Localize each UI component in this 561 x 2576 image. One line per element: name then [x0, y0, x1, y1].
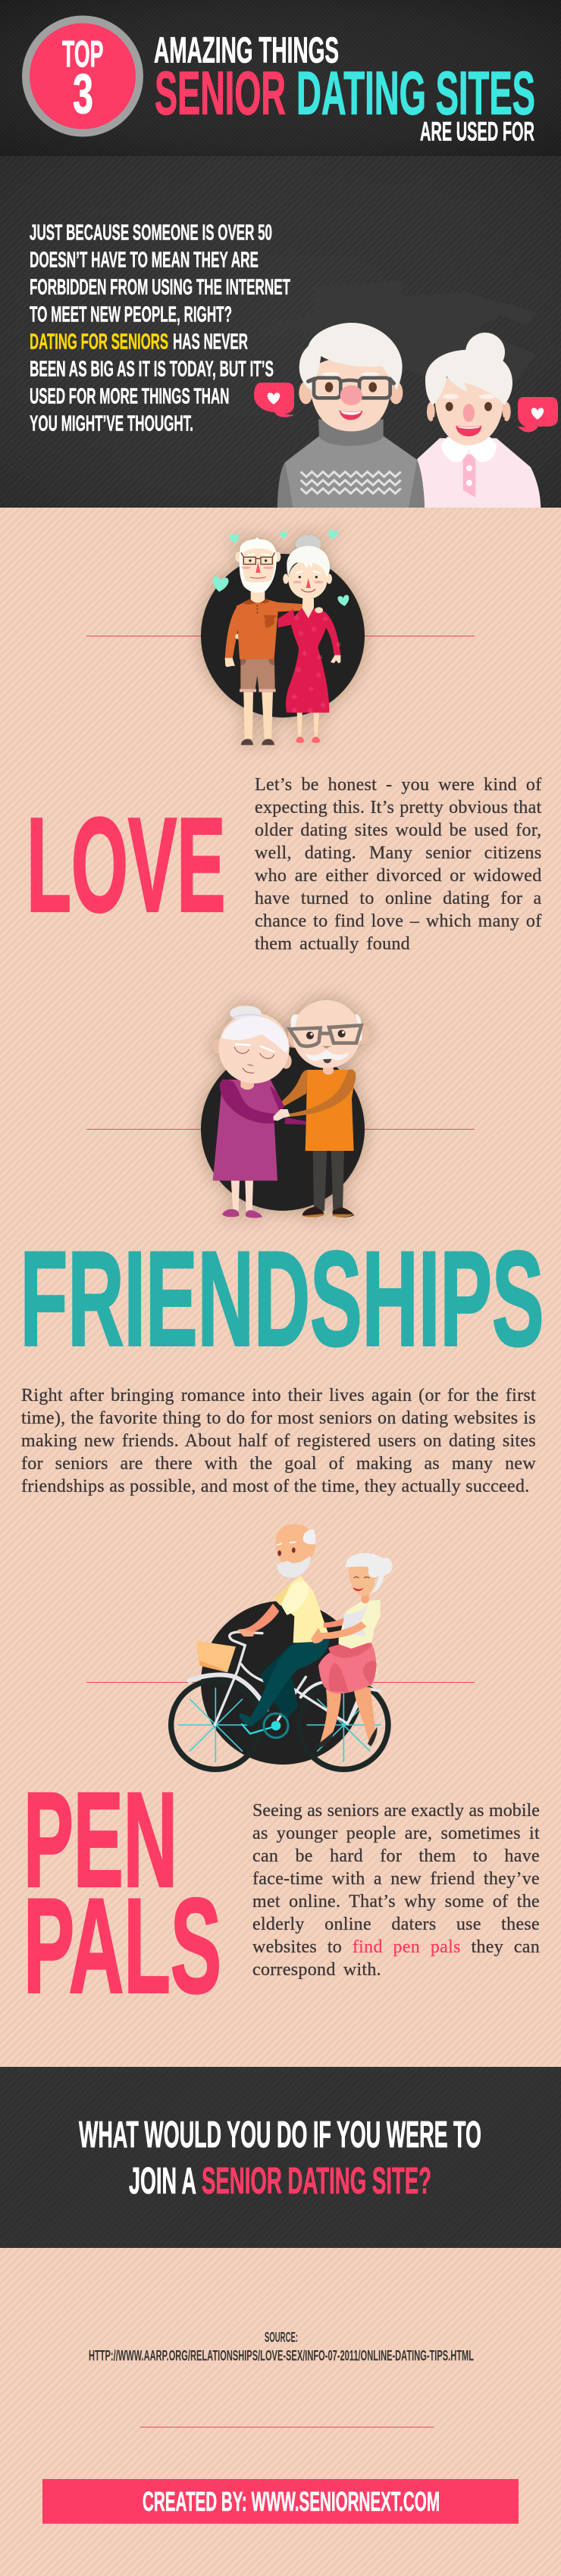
text block: pen pals: websites to find pen pals they can [252, 1937, 540, 1957]
icon: right heart bubble [518, 397, 558, 433]
man [237, 1524, 329, 1726]
woman [278, 535, 341, 743]
text block: pen pals: met online. That’s why some of the [252, 1892, 540, 1912]
text block: love: Let’s be honest - you were kind of [255, 775, 541, 795]
faint world map [250, 281, 537, 381]
woman [311, 1553, 393, 1748]
intro text: YOU MIGHT’VE THOUGHT. [30, 411, 193, 436]
intro text: FORBIDDEN FROM USING THE INTERNET [30, 275, 290, 299]
man [225, 537, 305, 745]
bicycle [171, 1632, 388, 1769]
text block: pen pals: correspond with. [252, 1960, 381, 1980]
intro text: USED FOR MORE THINGS THAN [30, 384, 229, 408]
text block: friendships: Right after bringing romance into their lives again (or for the first [21, 1386, 536, 1405]
woman [212, 1005, 306, 1218]
text block: love: expecting this. It’s pretty obvious that [255, 798, 541, 818]
credit bar [42, 2479, 519, 2524]
text block: friendships: time), the favorite thing to do for most seniors on dating websites is [21, 1408, 536, 1428]
text block: pen pals: face-time with a new friend they’ve [252, 1869, 540, 1889]
closing question [79, 2114, 481, 2202]
intro text [30, 220, 290, 436]
panel: call to action band [0, 2067, 561, 2248]
text block: friendships: making new friends. About half of registered users on dating sites [21, 1431, 536, 1451]
title: SENIOR [155, 59, 286, 127]
text block: pen pals [252, 1801, 540, 1980]
intro text: BEEN AS BIG AS IT IS TODAY, BUT IT’S [30, 357, 274, 381]
illustration: couple on bicycle [171, 1524, 393, 1769]
text block: love: chance to find love – which many of [255, 911, 541, 931]
woman portrait [417, 333, 541, 508]
heading: love: LOVE [27, 789, 226, 939]
text block: love: older dating sites would be used for, [255, 821, 541, 840]
crank [241, 1714, 288, 1738]
text block: love: have turned to online dating for a [255, 889, 541, 908]
intro text: TO MEET NEW PEOPLE, RIGHT? [30, 302, 232, 327]
heading: pen pals: PEN [24, 1764, 177, 1915]
text block: love [255, 775, 541, 954]
source [89, 2330, 474, 2365]
hearts [212, 529, 350, 607]
panel: header [0, 0, 561, 156]
title: AMAZING THINGS [154, 30, 339, 70]
text block: friendships: friendships as possible, and most of the time, they actually succeed. [21, 1477, 530, 1496]
badge: top 3 [22, 15, 143, 136]
intro text: HAS NEVER [173, 330, 248, 354]
closing question: JOIN A [129, 2160, 196, 2202]
text block: pen pals: can be hard for them to have [252, 1846, 540, 1866]
badge: top 3: 3 [73, 62, 93, 125]
man [274, 1000, 369, 1218]
illustration: friendship couple [201, 1000, 369, 1218]
text block: pen pals: elderly online daters use these [252, 1915, 540, 1934]
text block: friendships: for seniors are there with the goal of making as many new [21, 1454, 536, 1474]
title [154, 30, 535, 147]
text block: friendships [21, 1386, 536, 1496]
source: SOURCE: [265, 2330, 298, 2345]
divider lines [86, 636, 475, 2428]
illustration: love couple [201, 529, 365, 745]
illustration: senior couple portrait [277, 323, 541, 508]
intro text: JUST BECAUSE SOMEONE IS OVER 50 [30, 220, 272, 245]
heading: pen pals: PALS [24, 1870, 221, 2021]
heading: pen pals [24, 1764, 221, 2021]
text block: love: who are either divorced or widowed [255, 866, 541, 886]
badge: top 3: TOP [62, 33, 103, 75]
text block: love: well, dating. Many senior citizens [255, 843, 541, 863]
intro text: DOESN’T HAVE TO MEAN THEY ARE [30, 248, 259, 272]
text block: pen pals: as younger people are, sometimes it [252, 1824, 540, 1843]
intro text: DATING FOR SENIORS [30, 330, 168, 354]
text block: pen pals: Seeing as seniors are exactly as mobile [252, 1801, 540, 1821]
text block: love: them actually found [255, 934, 410, 954]
icon: left heart bubble [254, 383, 294, 417]
panel: intro [0, 156, 561, 508]
man portrait [277, 323, 425, 508]
